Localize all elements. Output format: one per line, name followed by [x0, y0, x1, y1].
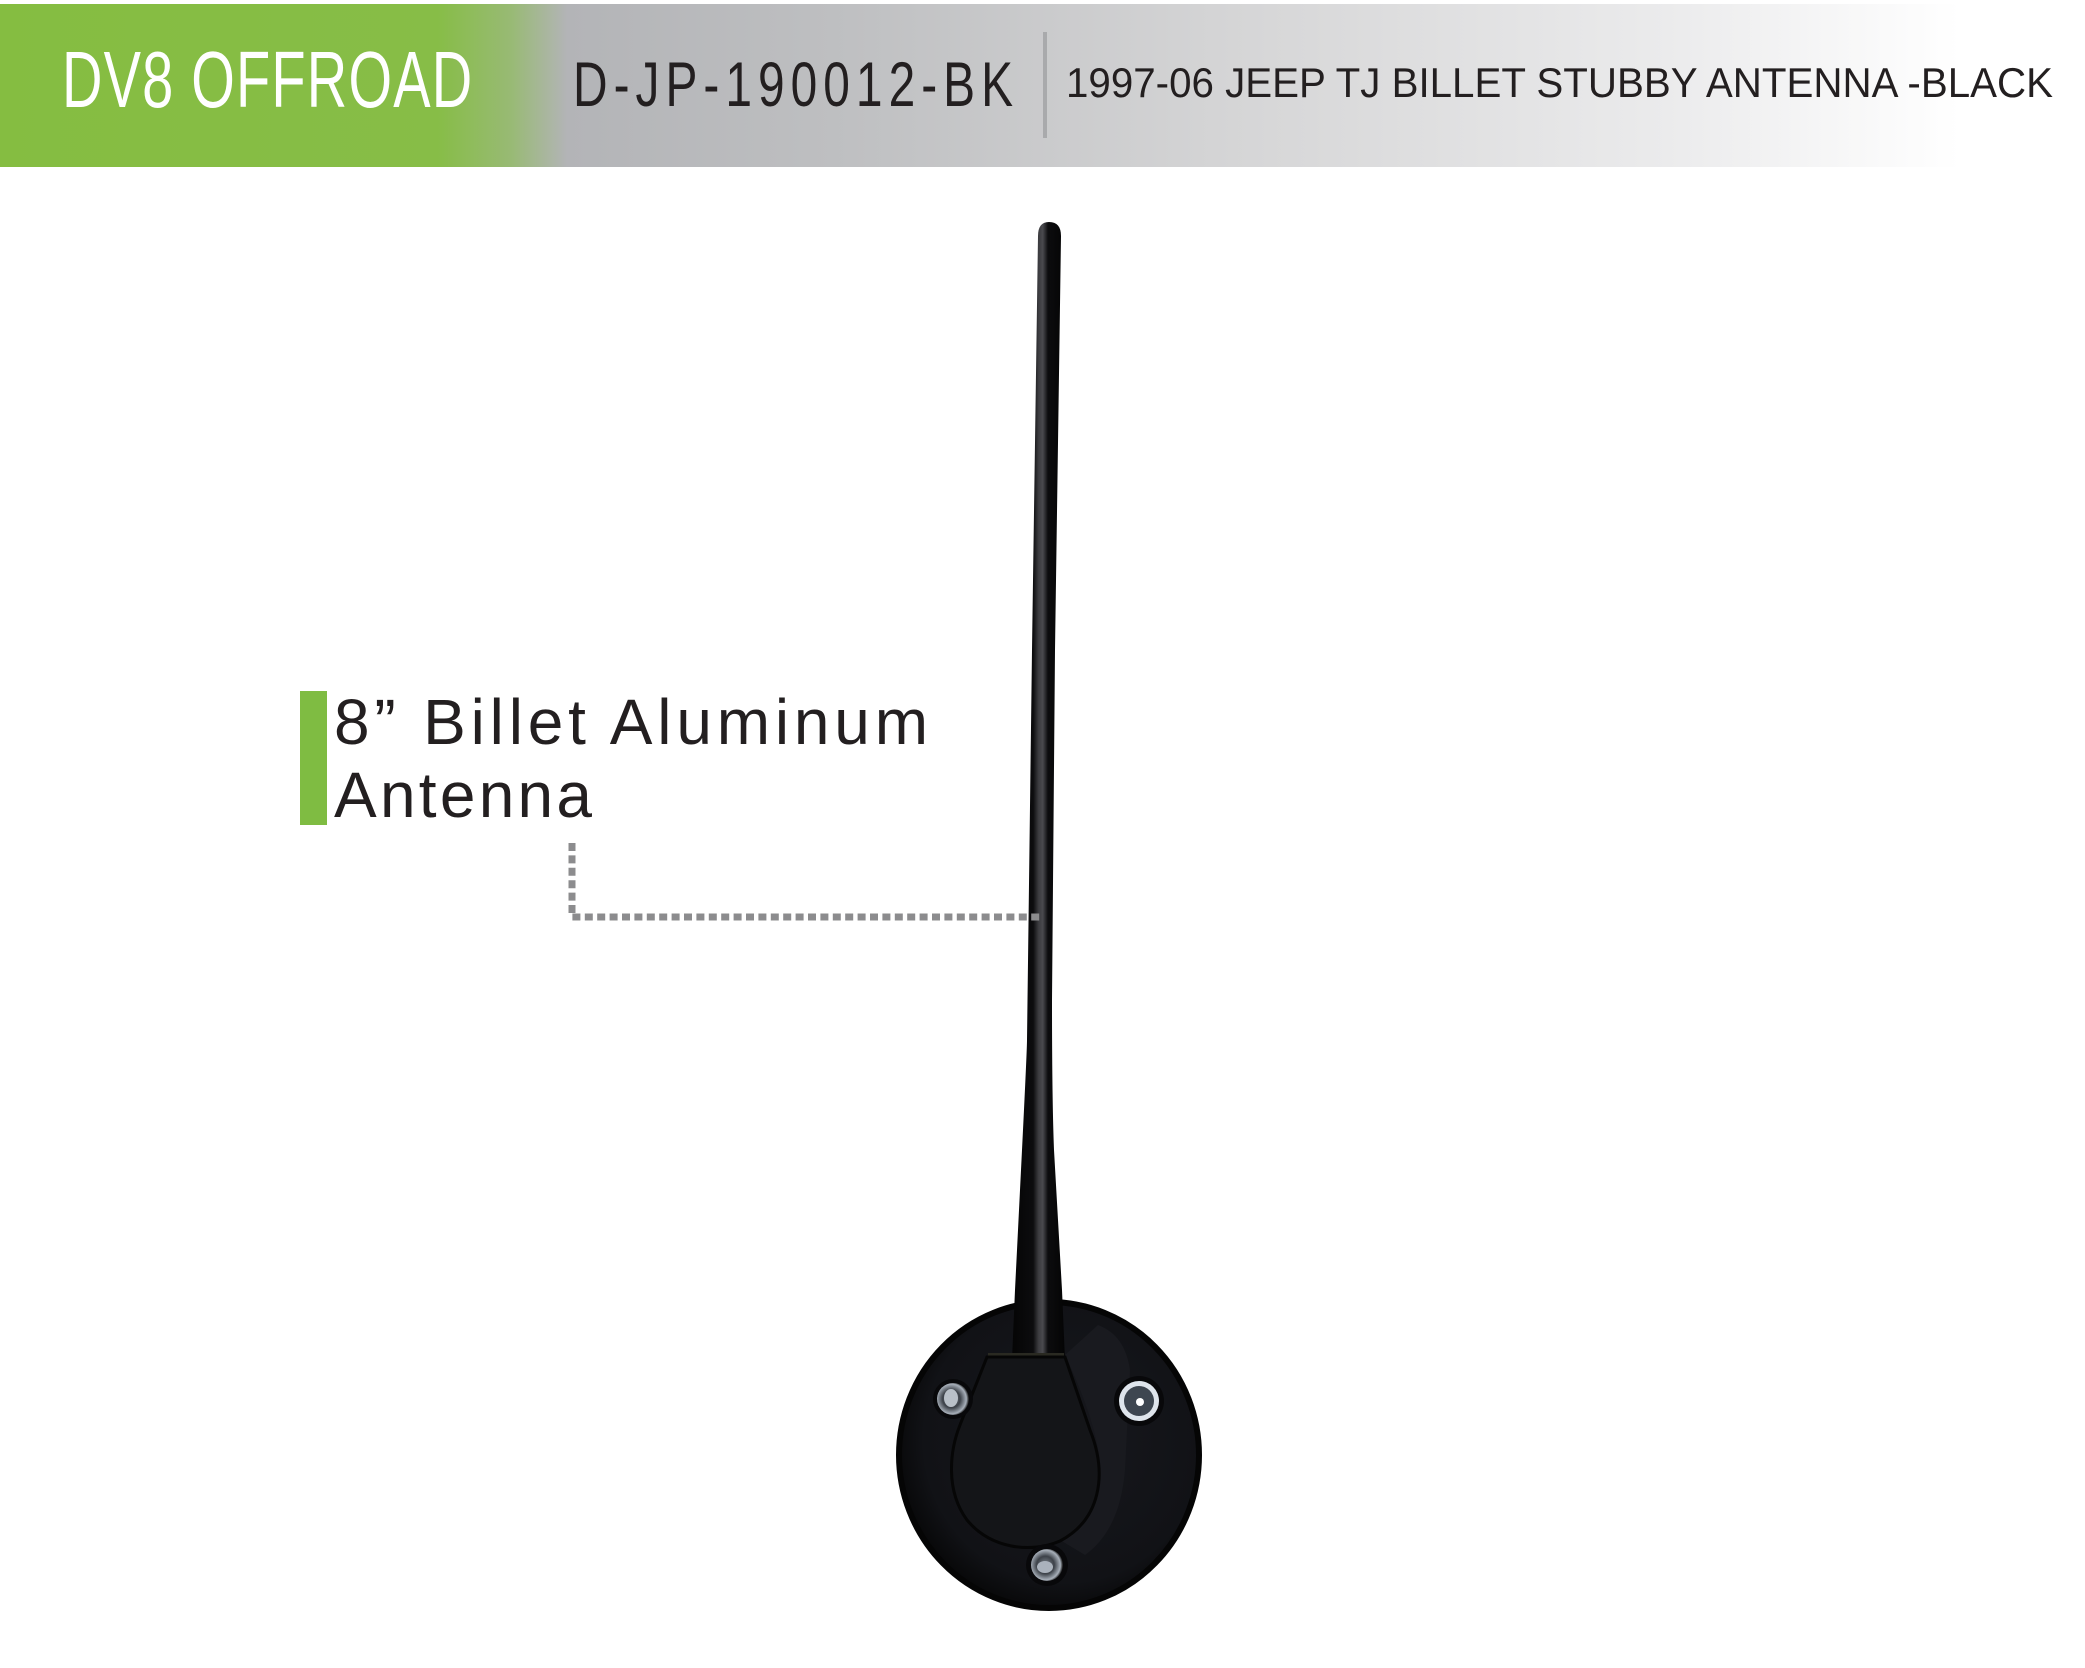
teardrop plate lip	[988, 1353, 1064, 1361]
part number: D-JP-190012-BK	[573, 49, 1013, 120]
callout text: Antenna	[334, 759, 592, 831]
antenna photo	[899, 222, 1199, 1608]
dotted leader line	[572, 843, 1043, 917]
callout text: 8” Billet Aluminum	[334, 686, 928, 758]
right grommet	[1114, 1376, 1164, 1426]
callout: antenna feature	[300, 686, 928, 831]
disc raised bevel	[1060, 1325, 1130, 1555]
left screw glint	[944, 1389, 958, 1407]
antenna rod	[1012, 222, 1065, 1360]
brand name: DV8 OFFROAD	[62, 34, 472, 124]
antenna base disc	[899, 1302, 1199, 1608]
header gradient bar	[0, 4, 2085, 167]
teardrop plate	[951, 1353, 1099, 1548]
bottom screw	[1026, 1544, 1068, 1586]
teardrop plate body	[951, 1357, 1099, 1548]
header banner	[0, 4, 2085, 167]
bottom screw glint	[1037, 1561, 1053, 1573]
header divider	[1043, 32, 1047, 138]
left screw	[933, 1379, 973, 1419]
product title: 1997-06 JEEP TJ BILLET STUBBY ANTENNA -BLACK	[1066, 59, 2053, 106]
callout green bar	[300, 691, 327, 825]
